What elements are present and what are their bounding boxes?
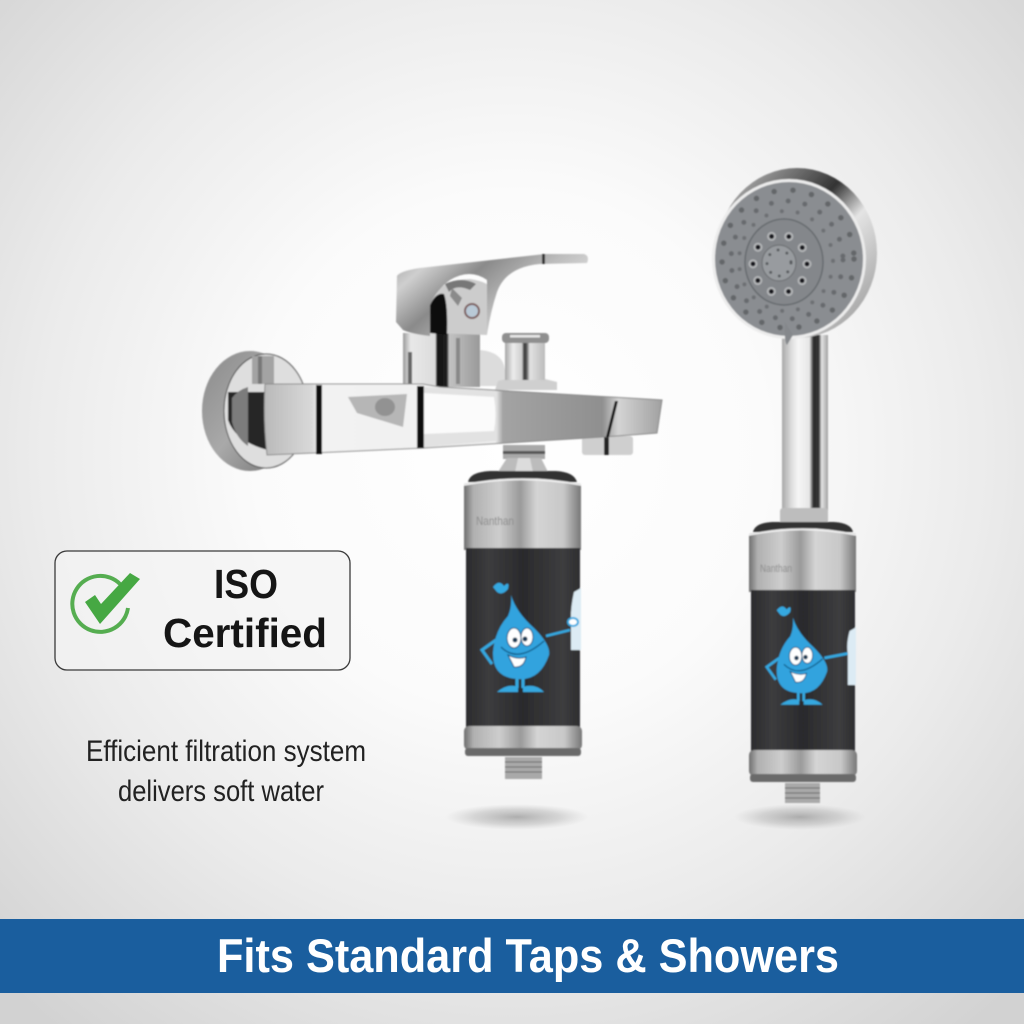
logo: Nanthan bbox=[476, 514, 514, 528]
valve cylinder bbox=[403, 333, 480, 387]
shower handle bbox=[782, 335, 828, 511]
inner spray ring bbox=[745, 219, 823, 305]
rear dome bbox=[480, 350, 505, 386]
handle collar bbox=[780, 508, 828, 524]
product: hand shower with filter bbox=[712, 168, 877, 803]
dark nozzles bbox=[753, 235, 807, 293]
bottom banner bbox=[0, 919, 1024, 993]
badge frame bbox=[55, 551, 350, 670]
caption: filtration: Efficient filtration system bbox=[86, 735, 366, 768]
right arm bbox=[824, 654, 848, 658]
spout stripes bbox=[316, 385, 618, 454]
head clip bbox=[785, 322, 793, 345]
badge text: ISO bbox=[214, 561, 278, 607]
spout white reflection bbox=[424, 393, 496, 434]
badge: ISO Certified bbox=[55, 551, 350, 670]
spindle under tap bbox=[498, 445, 548, 472]
left arm bbox=[482, 640, 496, 664]
hub under lever bbox=[430, 279, 491, 335]
spout body bbox=[264, 384, 662, 455]
diverter knob bbox=[495, 333, 557, 390]
floor shadow: shower filter bbox=[734, 804, 866, 830]
aerator bbox=[582, 436, 633, 455]
mouth bbox=[508, 655, 526, 667]
caption: filtration bbox=[86, 735, 366, 808]
eyes bbox=[507, 628, 521, 648]
smile bbox=[501, 641, 544, 654]
spout reflection bbox=[348, 394, 407, 427]
bottle bbox=[847, 627, 856, 685]
filter cartridge: tap bbox=[464, 471, 582, 779]
filter cartridge: shower bbox=[749, 522, 857, 803]
hand bbox=[568, 618, 578, 626]
left arm bbox=[767, 658, 779, 680]
icon: green check bbox=[72, 573, 140, 632]
shower head bbox=[712, 168, 877, 345]
wall mount plate bbox=[202, 351, 308, 471]
center disc bbox=[762, 245, 796, 281]
banner heading: Fits Standard Taps & Showers bbox=[217, 929, 839, 982]
logo: Nanthan bbox=[760, 563, 792, 575]
right arm bbox=[546, 630, 570, 636]
smile bbox=[784, 659, 823, 671]
mascot: water drop bbox=[482, 583, 581, 692]
outer nozzles bbox=[722, 190, 854, 328]
caption: filtration: delivers soft water bbox=[118, 775, 324, 808]
floor shadow: tap filter bbox=[445, 804, 589, 830]
eyes bbox=[789, 647, 802, 665]
lever handle bbox=[396, 254, 588, 336]
spout mid shading bbox=[424, 387, 496, 447]
legs and feet bbox=[517, 675, 523, 688]
bottle bbox=[571, 588, 581, 650]
mouth bbox=[790, 672, 806, 682]
product: wall tap with filter bbox=[202, 254, 662, 779]
mascot: water drop bbox=[767, 606, 856, 705]
drop body bbox=[493, 595, 549, 679]
drop body bbox=[777, 618, 827, 693]
badge: ISO Certified: Certified bbox=[163, 610, 327, 656]
lever tip mark bbox=[542, 254, 545, 264]
legs and feet bbox=[798, 690, 804, 701]
